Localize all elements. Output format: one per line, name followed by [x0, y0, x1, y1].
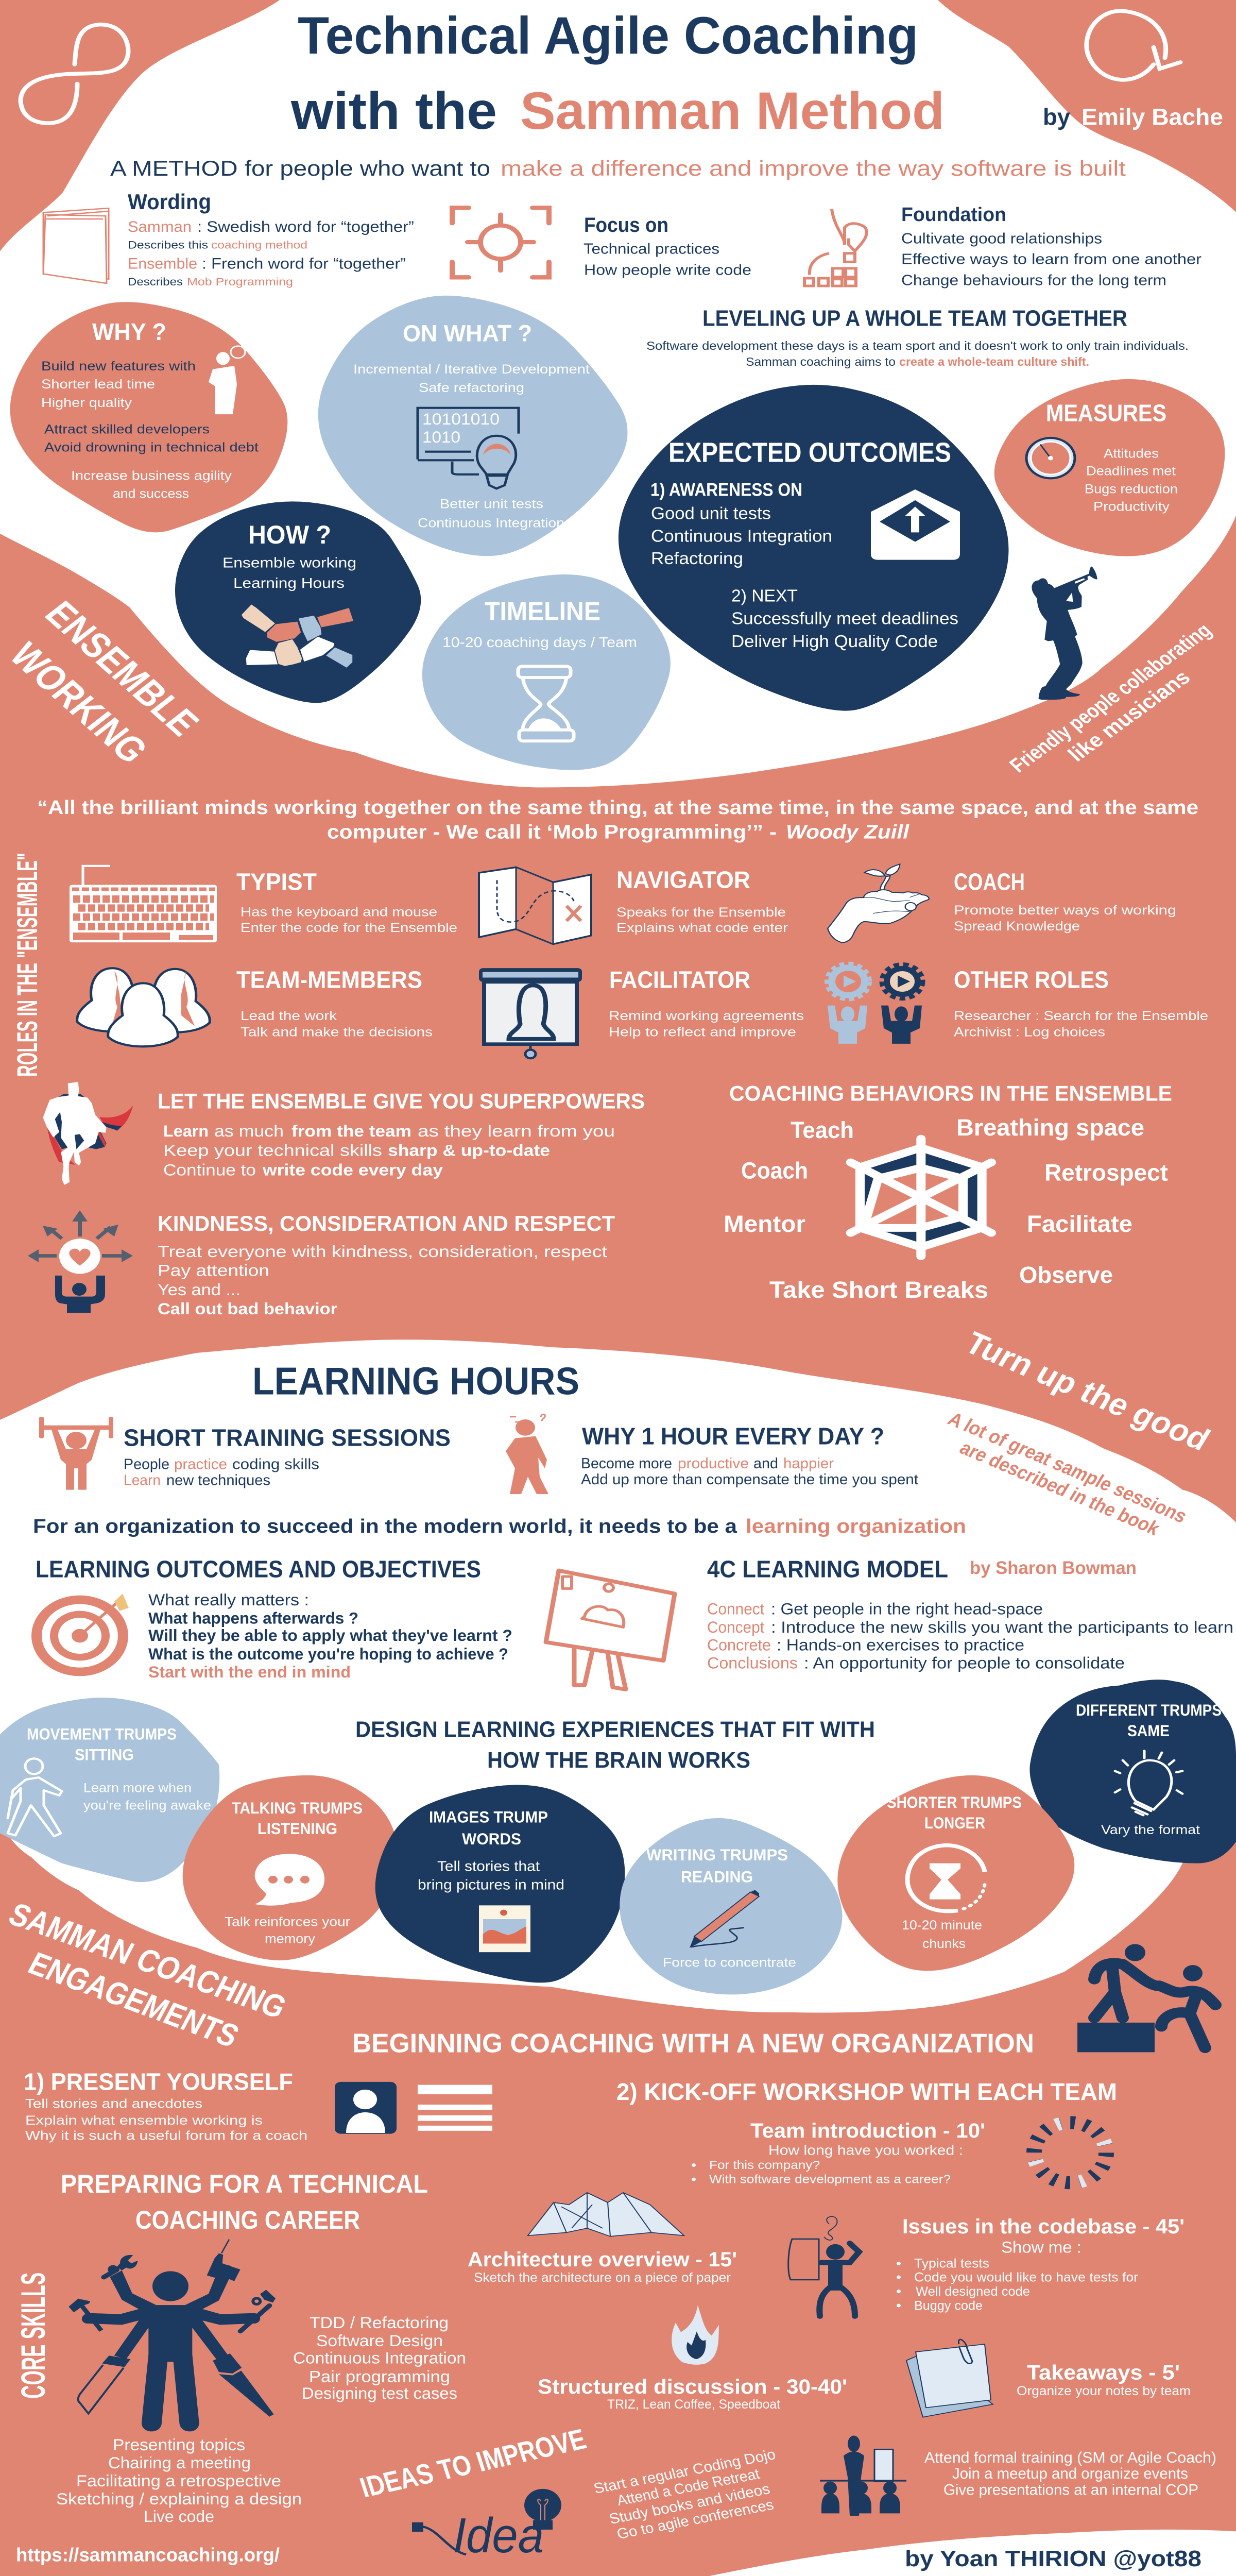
- panel: on what: Better unit tests: [440, 497, 543, 511]
- panel: expected outcomes: Continuous Integration: [651, 527, 832, 546]
- icon: kindness person: [28, 1210, 133, 1313]
- icon: gears and people: [827, 963, 923, 1044]
- background: ensemble band: [0, 516, 1236, 1522]
- role: other roles: Researcher : Search for the Ensemble: [954, 1008, 1208, 1023]
- icon: superhero: [43, 1082, 133, 1185]
- panel: why: Higher quality: [41, 395, 132, 410]
- step: architecture overview: [468, 2248, 737, 2285]
- panel: shorter trumps longer: 10-20 minute: [902, 1918, 982, 1932]
- list: technical core skills: Designing test cases: [302, 2384, 457, 2402]
- role: team members: TEAM-MEMBERS: [236, 966, 422, 993]
- icon: foundation blocks: [804, 209, 867, 286]
- vertical heading: core skills: CORE SKILLS: [14, 2273, 52, 2399]
- panel: kindness: KINDNESS, CONSIDERATION AND RESPECT: [158, 1211, 615, 1235]
- panel: different trumps same: SAME: [1127, 1722, 1170, 1740]
- panel: kindness: [158, 1211, 615, 1318]
- panel: foundation: Effective ways to learn from one another: [901, 251, 1201, 267]
- panel: why: Avoid drowning in technical debt: [44, 440, 259, 454]
- panel: superpowers: LET THE ENSEMBLE GIVE YOU SUPERPOWERS: [158, 1089, 645, 1113]
- panel: superpowers: as much: [214, 1122, 284, 1140]
- list: technical core skills: [293, 2314, 466, 2402]
- heading: ideas to improve: IDEAS TO IMPROVE: [356, 2423, 590, 2503]
- icon: confused person: [506, 1414, 548, 1494]
- heading: preparing: [61, 2170, 428, 2234]
- panel: short training sessions: practice: [174, 1456, 227, 1472]
- background: top right shape: [938, 0, 1236, 212]
- icon: trumpet player: [1032, 566, 1097, 700]
- panel: superpowers: Keep your technical skills: [163, 1141, 382, 1160]
- role: other roles: Archivist : Log choices: [954, 1025, 1105, 1039]
- panel: why: and success: [113, 486, 189, 501]
- list: ideas: Start a regular Coding Dojo: [592, 2446, 777, 2497]
- text: coaching behaviors words: Observe: [1019, 1262, 1113, 1288]
- panel: why: Increase business agility: [71, 468, 232, 483]
- step: team introduction: Team introduction - 10': [750, 2120, 985, 2142]
- panel: on what: Incremental / Iterative Development: [353, 362, 590, 376]
- panel: movement trumps sitting: you're feeling awake: [83, 1798, 211, 1812]
- panel: 4c learning model: Concept: [707, 1618, 764, 1636]
- panel: learning outcomes: LEARNING OUTCOMES AND OBJECTIVES: [36, 1555, 481, 1583]
- caption: friendly people: like musicians: [1063, 666, 1195, 766]
- text: coaching behaviors words: Mentor: [724, 1211, 805, 1237]
- step: issues in the codebase: Typical tests: [914, 2256, 989, 2270]
- panel: superpowers: as they learn from you: [418, 1122, 615, 1140]
- icon: infinity: [21, 25, 128, 123]
- panel: how: Ensemble working: [222, 555, 356, 571]
- text: coaching behaviors words: Coach: [741, 1158, 808, 1183]
- step: issues in the codebase: Issues in the codebase - 45': [902, 2215, 1184, 2238]
- panel: short training sessions: new techniques: [166, 1472, 270, 1488]
- list: ideas: Study books and videos: [607, 2481, 772, 2527]
- role: navigator: [616, 866, 788, 935]
- panel: on what: Safe refactoring: [419, 380, 524, 395]
- panel: 4c learning model: [707, 1555, 1233, 1672]
- step: issues in the codebase: Code you would like to have tests for: [914, 2270, 1138, 2284]
- tagline: A METHOD for people who want to: [110, 156, 490, 180]
- heading: leveling up: [646, 306, 1189, 368]
- step: architecture overview: Architecture overview - 15': [468, 2248, 737, 2271]
- text: coaching behaviors words: Retrospect: [1044, 1160, 1168, 1186]
- icon: picture: [479, 1905, 530, 1952]
- panel: images trump words: IMAGES TRUMP: [429, 1808, 548, 1826]
- list: technical core skills: Pair programming: [309, 2367, 450, 2386]
- panel: different trumps same: [1029, 1680, 1236, 1863]
- panel: measures: Deadlines met: [1086, 464, 1176, 478]
- heading: leveling up: Software development these days is a team sport and it doesn't work to only train individuals.: [646, 340, 1189, 353]
- heading: preparing: PREPARING FOR A TECHNICAL: [61, 2170, 428, 2198]
- role: coach: Spread Knowledge: [954, 919, 1080, 933]
- panel: writing trumps reading: READING: [681, 1868, 753, 1886]
- heading: design learning experiences: [355, 1718, 875, 1773]
- role: navigator: NAVIGATOR: [616, 866, 750, 893]
- panel: 4c learning model: by Sharon Bowman: [970, 1558, 1137, 1578]
- icon: thinking person: [209, 346, 245, 414]
- panel: measures: Productivity: [1093, 499, 1170, 514]
- heading: samman coaching engagements: ENGAGEMENTS: [23, 1945, 245, 2054]
- list: technical core skills: Software Design: [316, 2332, 443, 2350]
- panel: focus on: How people write code: [584, 262, 751, 278]
- panel: talking trumps listening: TALKING TRUMPS: [232, 1799, 363, 1817]
- panel: 4c learning model: : An opportunity for people to consolidate: [804, 1654, 1125, 1672]
- step: takeaways: Takeaways - 5': [1027, 2361, 1180, 2384]
- role: team members: Talk and make the decisions: [241, 1025, 433, 1039]
- byline: Emily Bache: by: [1043, 104, 1070, 130]
- list: technical core skills: TDD / Refactoring: [310, 2314, 449, 2332]
- list: ideas: Go to agile conferences: [615, 2496, 776, 2543]
- role: coach: Promote better ways of working: [954, 903, 1176, 917]
- role: coach: COACH: [954, 868, 1025, 895]
- icon: weightlifter: [39, 1417, 113, 1490]
- role: typist: [236, 868, 457, 935]
- list: ideas: [592, 2446, 777, 2543]
- step: issues in the codebase: Well designed code: [916, 2284, 1030, 2298]
- panel: measures: MEASURES: [1046, 399, 1166, 426]
- heading: design learning experiences: HOW THE BRAIN WORKS: [487, 1748, 750, 1773]
- title: with the: [290, 81, 497, 140]
- panel: shorter trumps longer: LONGER: [924, 1814, 985, 1832]
- panel: foundation: Change behaviours for the long term: [901, 272, 1166, 289]
- heading: leveling up: LEVELING UP A WHOLE TEAM TOGETHER: [702, 306, 1127, 331]
- quote: [37, 796, 1198, 843]
- background: engagements band: [0, 1760, 1236, 2576]
- background: top left shape: [0, 0, 280, 251]
- panel: wording: Samman: [128, 218, 192, 235]
- panel: expected outcomes: 1) AWARENESS ON: [650, 480, 802, 500]
- tagline: make a difference and improve the way software is built: [501, 156, 1126, 180]
- icon: screen and bulb: [418, 408, 519, 488]
- role: coach: [954, 868, 1176, 933]
- icon: focus target: [452, 208, 549, 277]
- text: coaching behaviors words: Take Short Breaks: [769, 1277, 988, 1303]
- panel: wording: : Swedish word for “together”: [197, 218, 414, 235]
- panel: measures: [994, 379, 1225, 556]
- panel: writing trumps reading: WRITING TRUMPS: [646, 1846, 788, 1864]
- panel: 4c learning model: Conclusions: [707, 1654, 798, 1672]
- panel: expected outcomes: Successfully meet deadlines: [731, 609, 958, 628]
- icon: walking person: [8, 1758, 62, 1836]
- background: bottom right corner: [710, 2530, 1236, 2576]
- step: architecture overview: Sketch the architecture on a piece of paper: [474, 2270, 731, 2285]
- icon: notes with paperclip: [906, 2340, 993, 2417]
- list: technical core skills: Continuous Integration: [293, 2349, 466, 2367]
- panel: kindness: Treat everyone with kindness, consideration, respect: [158, 1243, 607, 1261]
- quote: Woody Zuill: [786, 821, 909, 843]
- list: soft core skills: Chairing a meeting: [108, 2454, 251, 2472]
- heading: ensemble working: ENSEMBLE: [37, 594, 208, 743]
- icon: book: [43, 208, 109, 283]
- caption: sample sessions: are described in the book: [956, 1437, 1164, 1539]
- role: typist: TYPIST: [236, 868, 317, 895]
- role: facilitator: [609, 966, 804, 1039]
- panel: superpowers: [158, 1089, 645, 1179]
- panel: why: Attract skilled developers: [44, 422, 210, 436]
- step: issues in the codebase: [897, 2215, 1184, 2313]
- panel: short training sessions: [124, 1424, 451, 1488]
- panel: images trump words: WORDS: [462, 1830, 521, 1848]
- panel: present yourself: 1) PRESENT YOURSELF: [24, 2068, 293, 2095]
- step: team introduction: With software development as a career?: [709, 2173, 951, 2186]
- icon: person with scroll: [788, 2216, 859, 2316]
- step: structured discussion: Structured discussion - 30-40': [538, 2376, 847, 2398]
- heading: beginning coaching: BEGINNING COACHING WITH A NEW ORGANIZATION: [352, 2028, 1034, 2058]
- panel: images trump words: Tell stories that: [437, 1859, 540, 1874]
- heading: kick-off workshop: 2) KICK-OFF WORKSHOP WITH EACH TEAM: [616, 2078, 1117, 2105]
- list: training and meetups: [924, 2449, 1216, 2499]
- step: team introduction: How long have you worked :: [768, 2143, 963, 2158]
- panel: expected outcomes: Refactoring: [651, 549, 743, 568]
- panel: learning outcomes: Will they be able to apply what they've learnt ?: [148, 1626, 512, 1645]
- panel: foundation: [901, 204, 1201, 289]
- step: team introduction: For this company?: [709, 2159, 820, 2172]
- panel: timeline: TIMELINE: [485, 597, 600, 625]
- panel: 4c learning model: : Hands-on exercises to practice: [777, 1636, 1024, 1654]
- icon: envelope: [871, 489, 960, 560]
- list: soft core skills: [56, 2436, 302, 2526]
- icon: screen and bulb: 1010: [422, 428, 460, 446]
- panel: why 1 hour: happier: [783, 1455, 834, 1471]
- panel: wording: coaching method: [211, 239, 307, 251]
- panel: superpowers: write code every day: [262, 1161, 443, 1179]
- role: typist: Has the keyboard and mouse: [241, 905, 437, 919]
- panel: why 1 hour: and: [753, 1455, 778, 1471]
- panel: expected outcomes: Deliver High Quality Code: [731, 632, 938, 651]
- step: team introduction: [692, 2120, 985, 2186]
- icon: screen and bulb: 10101010: [422, 410, 500, 428]
- icon: keyboard: [70, 866, 217, 942]
- icon: light bulb: [1115, 1751, 1182, 1815]
- panel: present yourself: [24, 2068, 307, 2143]
- icon: idea bulb and plug: Idea: [453, 2508, 544, 2563]
- title: Samman Method: [520, 81, 945, 140]
- heading: ensemble working: WORKING: [1, 635, 157, 770]
- panel: how: HOW ?: [248, 520, 331, 549]
- panel: short training sessions: SHORT TRAINING SESSIONS: [124, 1424, 451, 1451]
- panel: wording: Mob Programming: [187, 276, 293, 289]
- panel: superpowers: sharp & up-to-date: [388, 1141, 550, 1160]
- panel: present yourself: Explain what ensemble working is: [25, 2113, 263, 2128]
- panel: why: Shorter lead time: [41, 377, 155, 392]
- panel: talking trumps listening: memory: [265, 1931, 315, 1946]
- heading: design learning experiences: DESIGN LEARNING EXPERIENCES THAT FIT WITH: [355, 1718, 875, 1742]
- panel: 4c learning model: Connect: [707, 1600, 764, 1618]
- heading: leveling up: Samman coaching aims to: [746, 355, 896, 368]
- footer link: https://sammancoaching.org/: [16, 2544, 280, 2566]
- panel: kindness: Pay attention: [158, 1262, 269, 1280]
- panel: movement trumps sitting: SITTING: [75, 1746, 134, 1764]
- icon: presentation board: [479, 968, 582, 1058]
- panel: wording: : French word for “together”: [202, 255, 406, 273]
- icon: climbing figures: [1077, 1944, 1215, 2052]
- step: takeaways: [1017, 2361, 1191, 2398]
- icon: joined hands: [241, 604, 354, 668]
- panel: wording: Wording: [128, 190, 211, 214]
- heading: leveling up: create a whole-team culture shift.: [899, 355, 1089, 368]
- text: coaching behaviors words: Breathing space: [956, 1114, 1144, 1141]
- panel: foundation: Foundation: [901, 204, 1006, 225]
- panel: short training sessions: coding skills: [232, 1456, 319, 1472]
- panel: images trump words: [375, 1785, 625, 1982]
- panel: why 1 hour: WHY 1 HOUR EVERY DAY ?: [582, 1422, 884, 1449]
- icon: dial: [1026, 438, 1075, 478]
- step: issues in the codebase: Show me :: [1001, 2238, 1082, 2257]
- panel: on what: ON WHAT ?: [403, 320, 532, 346]
- panel: 4c learning model: Concrete: [707, 1636, 771, 1654]
- panel: writing trumps reading: [620, 1818, 843, 1994]
- text: learning organization: learning organization: [746, 1515, 966, 1537]
- panel: wording: Ensemble: [128, 255, 197, 273]
- list: training and meetups: Join a meetup and organize events: [952, 2465, 1188, 2482]
- panel: why: WHY ?: [92, 318, 166, 345]
- list: soft core skills: Sketching / explaining a design: [56, 2490, 302, 2508]
- panel: superpowers: Learn: [163, 1122, 209, 1140]
- role: team members: Lead the work: [241, 1008, 337, 1023]
- panel: shorter trumps longer: [837, 1775, 1074, 1971]
- panel: present yourself: Why it is such a useful forum for a coach: [25, 2128, 307, 2143]
- panel: shorter trumps longer: chunks: [922, 1936, 966, 1951]
- panel: why 1 hour: productive: [678, 1455, 749, 1471]
- icon: web: [851, 1139, 991, 1256]
- panel: expected outcomes: Good unit tests: [651, 504, 771, 523]
- heading: learning hours: LEARNING HOURS: [252, 1360, 579, 1403]
- panel: measures: Attitudes: [1104, 446, 1159, 461]
- step: structured discussion: TRIZ, Lean Coffee, Speedboat: [607, 2397, 780, 2411]
- panel: learning outcomes: What happens afterwards ?: [148, 1609, 358, 1628]
- panel: different trumps same: Vary the format: [1101, 1822, 1200, 1837]
- panel: talking trumps listening: Talk reinforces your: [225, 1914, 350, 1929]
- list: soft core skills: Presenting topics: [113, 2436, 245, 2454]
- panel: measures: Bugs reduction: [1085, 482, 1178, 496]
- panel: why: Build new features with: [41, 359, 196, 374]
- text: coaching behaviors words: [724, 1114, 1168, 1303]
- panel: short training sessions: People: [124, 1456, 169, 1472]
- icon: folded map: [528, 2193, 684, 2236]
- panel: focus on: [583, 214, 751, 278]
- panel: learning outcomes: What is the outcome you're hoping to achieve ?: [148, 1645, 508, 1663]
- step: takeaways: Organize your notes by team: [1017, 2384, 1191, 2398]
- icon: multi-armed person with tools: [68, 2240, 276, 2431]
- title: Technical Agile Coaching: [298, 6, 918, 65]
- text: learning organization: For an organization to succeed in the modern world, it needs to be a: [33, 1515, 737, 1537]
- list: ideas: Attend a Code Retreat: [615, 2466, 762, 2509]
- panel: superpowers: from the team: [291, 1122, 411, 1140]
- panel: why 1 hour: [581, 1422, 918, 1487]
- panel: writing trumps reading: Force to concentrate: [663, 1955, 796, 1970]
- icon: circle of people: [1034, 2123, 1106, 2183]
- icon: pencil: [690, 1890, 759, 1948]
- panel: movement trumps sitting: MOVEMENT TRUMPS: [27, 1725, 177, 1743]
- text: coaching behaviors words: Facilitate: [1027, 1211, 1132, 1237]
- panel: timeline: [422, 574, 671, 770]
- icon: idea bulb and plug: [412, 2489, 561, 2563]
- panel: timeline: 10-20 coaching days / Team: [442, 635, 637, 650]
- role: navigator: Explains what code enter: [616, 921, 788, 935]
- panel: present yourself: Tell stories and anecdotes: [25, 2096, 202, 2111]
- heading: preparing: COACHING CAREER: [135, 2206, 360, 2234]
- panel: how: Learning Hours: [233, 575, 345, 591]
- panel: expected outcomes: 2) NEXT: [731, 586, 798, 605]
- panel: how: [175, 501, 421, 703]
- panel: wording: Describes: [128, 276, 183, 289]
- panel: talking trumps listening: [183, 1775, 397, 1960]
- panel: kindness: Call out bad behavior: [158, 1300, 337, 1318]
- role: team members: [236, 966, 433, 1039]
- panel: short training sessions: Learn: [124, 1472, 161, 1488]
- panel: shorter trumps longer: SHORTER TRUMPS: [887, 1793, 1022, 1811]
- panel: 4c learning model: 4C LEARNING MODEL: [707, 1555, 948, 1583]
- panel: wording: Describes this: [128, 239, 208, 251]
- tagline: [110, 156, 1126, 180]
- title: [290, 6, 945, 140]
- panel: why 1 hour: Add up more than compensate the time you spent: [581, 1471, 918, 1487]
- role: facilitator: Help to reflect and improve: [609, 1025, 796, 1039]
- icon: speech bubble: [255, 1854, 324, 1906]
- footer credit: by Yoan THIRION @yot88: [905, 2547, 1201, 2571]
- vertical heading: roles: ROLES IN THE "ENSEMBLE": [11, 853, 43, 1077]
- panel: learning outcomes: What really matters :: [148, 1591, 309, 1609]
- panel: on what: Continuous Integration: [418, 516, 564, 530]
- panel: focus on: Focus on: [584, 214, 668, 236]
- list: soft core skills: Live code: [144, 2507, 214, 2526]
- role: other roles: OTHER ROLES: [954, 966, 1109, 993]
- step: issues in the codebase: Buggy code: [914, 2298, 983, 2313]
- panel: images trump words: bring pictures in mind: [418, 1877, 564, 1893]
- panel: why: [10, 302, 287, 532]
- panel: expected outcomes: EXPECTED OUTCOMES: [668, 438, 951, 468]
- icon: hourglass: [518, 666, 574, 741]
- panel: on what: [318, 296, 627, 556]
- icon: easel: [546, 1570, 675, 1689]
- icon: audience and speaker: [820, 2436, 906, 2516]
- icon: fire: [672, 2305, 719, 2365]
- panel: movement trumps sitting: Learn more when: [83, 1781, 192, 1795]
- panel: focus on: Technical practices: [583, 241, 719, 257]
- icon: timer: [907, 1845, 985, 1911]
- panel: why 1 hour: Become more: [581, 1455, 672, 1471]
- panel: wording: [128, 190, 414, 289]
- icon: map: [479, 867, 591, 944]
- icon: hand with sprout: [828, 864, 929, 942]
- role: facilitator: Remind working agreements: [609, 1008, 804, 1023]
- text: coaching behaviors words: Teach: [791, 1117, 854, 1143]
- panel: talking trumps listening: LISTENING: [258, 1820, 337, 1838]
- role: other roles: [954, 966, 1208, 1039]
- panel: superpowers: Continue to: [163, 1161, 256, 1179]
- role: typist: Enter the code for the Ensemble: [241, 921, 457, 935]
- quote: computer - We call it ‘Mob Programming’” -: [327, 821, 777, 843]
- panel: learning outcomes: [36, 1555, 512, 1681]
- role: navigator: Speaks for the Ensemble: [616, 905, 786, 920]
- panel: 4c learning model: : Get people in the right head-space: [771, 1600, 1043, 1618]
- panel: movement trumps sitting: [0, 1698, 219, 1882]
- list: soft core skills: Facilitating a retrospective: [76, 2472, 281, 2490]
- icon: profile card: [335, 2082, 492, 2134]
- panel: expected outcomes: [619, 385, 1008, 711]
- icon: circular arrow: [1087, 11, 1180, 80]
- heading: samman coaching engagements: SAMMAN COACHING: [3, 1896, 292, 2025]
- step: structured discussion: [538, 2376, 847, 2411]
- panel: learning outcomes: Start with the end in mind: [148, 1663, 351, 1681]
- panel: foundation: Cultivate good relationships: [901, 230, 1102, 247]
- role: facilitator: FACILITATOR: [609, 966, 750, 993]
- icon: team members: [77, 968, 210, 1046]
- icon: target: [37, 1594, 129, 1672]
- panel: kindness: Yes and ...: [158, 1281, 241, 1299]
